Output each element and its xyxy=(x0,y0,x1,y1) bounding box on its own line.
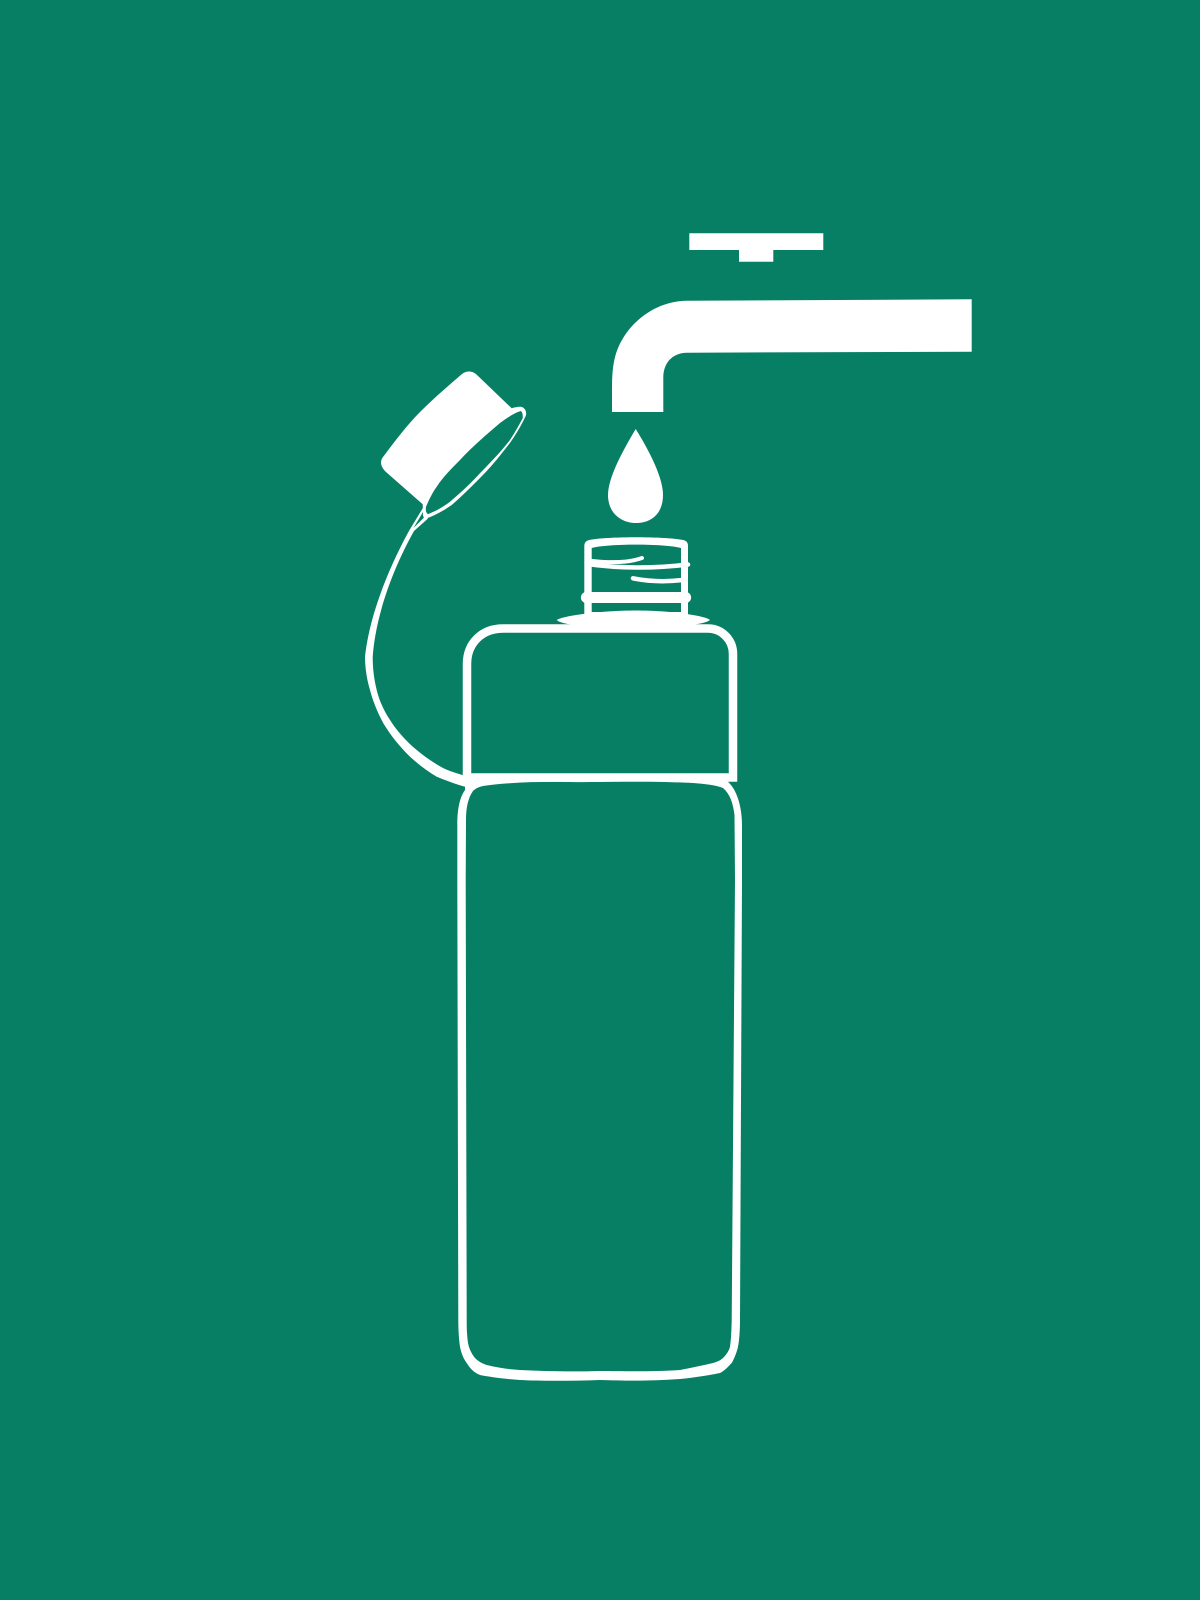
neck flange xyxy=(557,610,710,626)
cap body and rim xyxy=(381,371,526,518)
icon: tap xyxy=(612,233,972,412)
bottle body xyxy=(457,777,742,1381)
bottle shoulder xyxy=(467,628,733,778)
tap handle xyxy=(689,233,823,262)
icon: water drop xyxy=(608,429,663,523)
screw thread lines xyxy=(587,558,688,581)
cap opening xyxy=(426,411,523,514)
neck top rim and walls xyxy=(584,537,688,618)
tap spout xyxy=(612,299,972,412)
neck band xyxy=(581,592,691,603)
strap xyxy=(365,507,468,787)
bottle neck xyxy=(557,537,710,626)
icon: bottle cap with strap xyxy=(365,371,526,787)
